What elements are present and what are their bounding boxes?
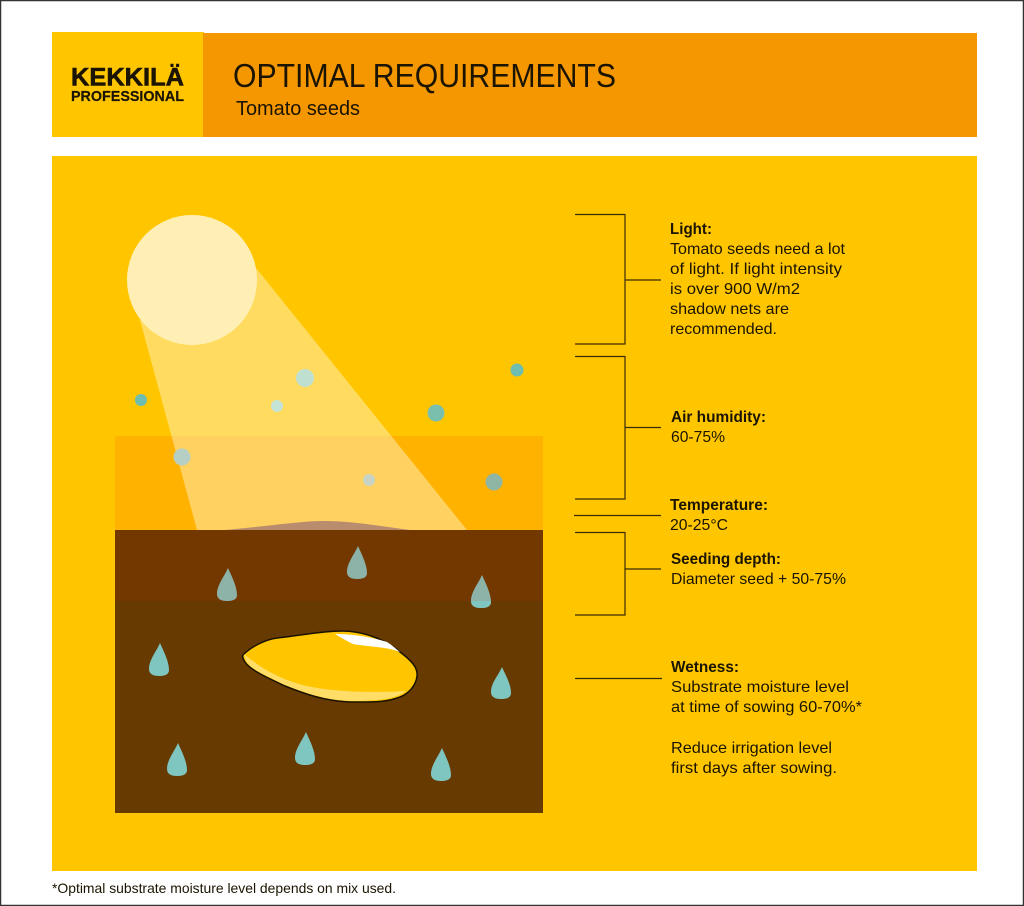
text: wetness: Reduce irrigation level (671, 740, 832, 757)
title: OPTIMAL REQUIREMENTS (233, 57, 616, 94)
text: temperature: Temperature: (670, 497, 768, 514)
text: light: Light: (670, 221, 712, 238)
air layer (115, 436, 543, 530)
humidity droplets in air (135, 364, 524, 490)
logo: PROFESSIONAL (71, 88, 184, 105)
footnote: *Optimal substrate moisture level depends on mix used. (52, 880, 396, 896)
bracket: light (575, 214, 661, 344)
seed (243, 631, 417, 702)
text: wetness: Substrate moisture level (671, 679, 849, 696)
text: wetness: at time of sowing 60-70%* (671, 699, 862, 716)
text: light: shadow nets are (670, 301, 789, 318)
text: wetness (671, 659, 862, 777)
subtitle: Tomato seeds (236, 98, 360, 120)
text: air humidity: Air humidity: (671, 409, 766, 426)
line: wetness (575, 678, 662, 680)
text: light (670, 221, 846, 338)
bracket: seeding depth (575, 532, 661, 615)
text: temperature: 20-25°C (670, 517, 728, 534)
header banner (52, 32, 977, 137)
illustration: soil, air, sun and seed (115, 215, 543, 813)
text: wetness: Wetness: (671, 659, 739, 676)
text: temperature (670, 497, 768, 534)
text: wetness: first days after sowing. (671, 760, 837, 777)
text: light: recommended. (670, 321, 777, 338)
lower soil layer (115, 601, 543, 813)
upper soil layer (115, 530, 543, 601)
text: light: of light. If light intensity (670, 261, 842, 278)
logo: KEKKILÄ (71, 64, 184, 92)
text: seeding depth (671, 551, 846, 588)
bracket: air humidity (575, 356, 661, 499)
soil mound (225, 521, 410, 530)
sun light beam (140, 268, 467, 530)
text: seeding depth: Seeding depth: (671, 551, 781, 568)
logo (71, 64, 184, 105)
water drops (149, 546, 511, 781)
text: air humidity (671, 409, 766, 446)
text: light: Tomato seeds need a lot (670, 241, 846, 258)
text: seeding depth: Diameter seed + 50-75% (671, 571, 846, 588)
sun (127, 215, 257, 345)
line: temperature (574, 514, 661, 516)
text: light: is over 900 W/m2 (670, 281, 800, 298)
text: air humidity: 60-75% (671, 429, 725, 446)
main panel (52, 156, 977, 871)
